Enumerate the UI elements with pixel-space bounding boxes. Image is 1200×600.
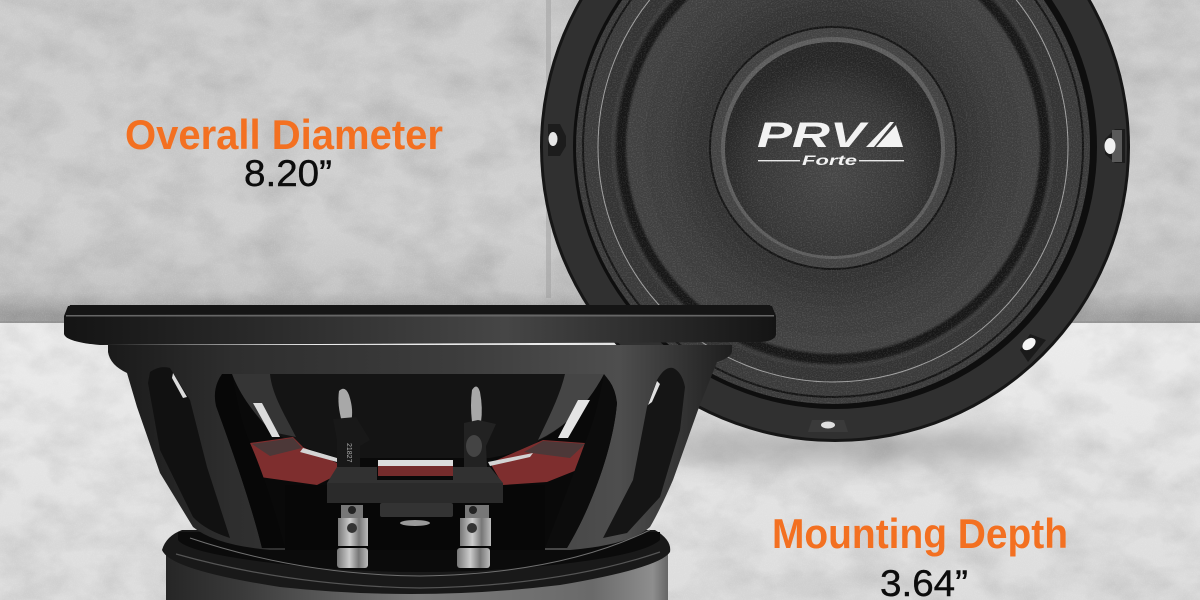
cone underside	[232, 374, 604, 458]
lower cavity	[285, 485, 545, 550]
magnet assembly	[162, 530, 670, 600]
side-view speaker	[64, 305, 776, 600]
label: mounting depth	[772, 510, 1068, 600]
terminal block	[327, 467, 503, 526]
wall gaps	[253, 403, 280, 437]
left terminal and lead: 21827	[345, 443, 352, 463]
top flange	[64, 305, 776, 345]
label: overall diameter	[125, 111, 443, 194]
PRV Forte logo: PRV	[757, 116, 869, 155]
foam surround	[576, 0, 1090, 404]
value: 8.20”	[244, 153, 332, 194]
red spider	[250, 437, 337, 485]
slots	[148, 367, 230, 538]
heading: Overall Diameter	[125, 111, 443, 158]
interior opening	[148, 367, 685, 550]
left terminal and lead	[333, 389, 370, 568]
heading: Mounting Depth	[772, 510, 1068, 557]
front-view speaker	[540, 0, 1130, 442]
PRV Forte logo	[757, 116, 904, 168]
basket	[108, 345, 732, 550]
right terminal and lead	[457, 386, 496, 568]
paper cone	[626, 0, 1040, 354]
speaker frame	[540, 0, 1130, 442]
PRV Forte logo: Forte	[802, 152, 857, 168]
inner struts	[215, 374, 285, 548]
mounting holes	[548, 124, 1125, 432]
dust cap	[709, 26, 957, 270]
